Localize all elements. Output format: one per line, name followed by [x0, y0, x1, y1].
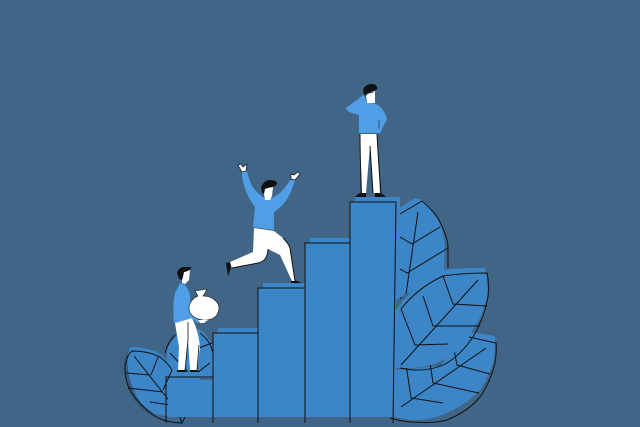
- hands: [238, 164, 300, 180]
- stair outlines: [166, 202, 396, 423]
- shoes: [355, 193, 386, 197]
- legs: [175, 318, 200, 370]
- sweater: [173, 283, 200, 323]
- legs: [230, 228, 295, 281]
- stair fill: [168, 197, 400, 417]
- sweater and arm: [346, 95, 387, 133]
- figure: person carrying a money bag: [173, 267, 219, 372]
- right middle leaf: [396, 268, 489, 370]
- left leaf: [124, 347, 200, 423]
- shoes: [226, 262, 302, 283]
- right bottom leaf: [390, 332, 496, 423]
- face and hair: [182, 270, 190, 284]
- face and hair: [263, 187, 273, 200]
- figure: jumping person with arms raised: [226, 164, 302, 283]
- right top leaf: [396, 198, 448, 300]
- face and hair: [366, 91, 375, 103]
- hand: [198, 320, 208, 323]
- staircase: [166, 197, 400, 423]
- figure: person on top step: [346, 84, 387, 197]
- leaf behind the carrying figure: [165, 328, 217, 378]
- money bag: [189, 289, 219, 320]
- shoes: [177, 370, 200, 372]
- legs: [360, 134, 380, 193]
- sweater and arms: [242, 171, 295, 230]
